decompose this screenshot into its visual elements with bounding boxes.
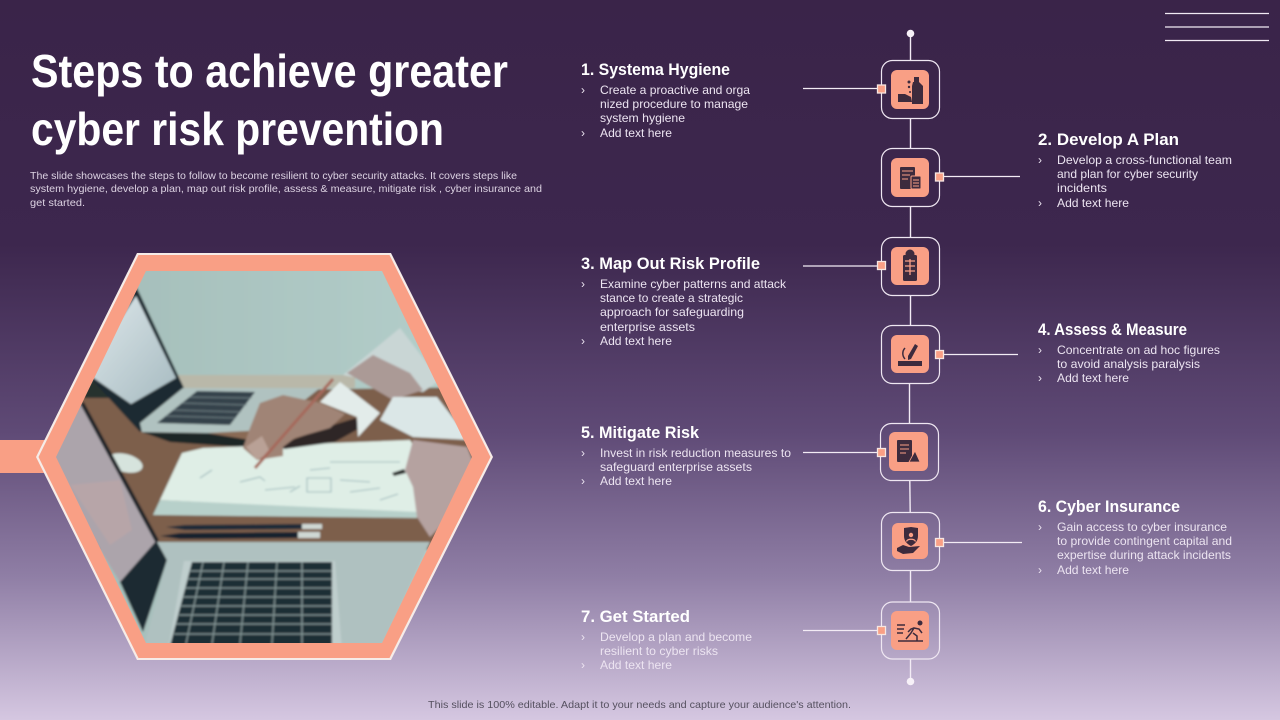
step 7 text: Add text here (600, 658, 672, 672)
step 6 text: Add text here (1057, 563, 1129, 577)
step 3 node (803, 238, 940, 296)
step 6 text (1038, 497, 1232, 577)
timeline start dot (907, 30, 914, 37)
description text: The slide showcases the steps to follow to become resilient to cyber security attacks. It covers steps like (30, 171, 517, 182)
step 5 text (581, 423, 791, 488)
step 3 text: › (581, 334, 585, 348)
step 6 text: › (1038, 520, 1042, 534)
title: cyber risk prevention (31, 103, 444, 155)
step 7 text: Develop a plan and become (600, 630, 752, 644)
step 1 text: › (581, 126, 585, 140)
step 1 text: › (581, 83, 585, 97)
step 3 text: Examine cyber patterns and attack (600, 277, 787, 291)
title: Steps to achieve greater (31, 45, 508, 97)
icon: pencil and ruler (898, 344, 922, 366)
step 7 text: › (581, 630, 585, 644)
step 3 text: stance to create a strategic (600, 291, 743, 305)
timeline spine (910, 33, 911, 681)
description text (30, 171, 542, 209)
step 6 text: 6. Cyber Insurance (1038, 497, 1180, 516)
icon: sanitizer spray and hand (898, 77, 923, 104)
step 6 text: expertise during attack incidents (1057, 548, 1231, 562)
step 4 text: › (1038, 371, 1042, 385)
title (31, 45, 508, 155)
step 6 text: Gain access to cyber insurance (1057, 520, 1227, 534)
step 5 text: safeguard enterprise assets (600, 460, 752, 474)
step 4 text: 4. Assess & Measure (1038, 320, 1187, 339)
step 1 text: Create a proactive and orga (600, 83, 750, 97)
step 5 text: 5. Mitigate Risk (581, 423, 700, 442)
step 5 text: › (581, 474, 585, 488)
step 6 text: to provide contingent capital and (1057, 534, 1232, 548)
description text: get started. (30, 198, 85, 209)
step 4 node (882, 326, 1018, 384)
step 3 text: › (581, 277, 585, 291)
step 5 text: Add text here (600, 474, 672, 488)
step 1 text: nized procedure to manage (600, 97, 748, 111)
step 1 text (581, 60, 750, 140)
decorative menu lines (1165, 14, 1269, 40)
step 3 text: approach for safeguarding (600, 305, 744, 319)
step 7 node (803, 602, 940, 659)
step 3 text: 3. Map Out Risk Profile (581, 254, 760, 273)
icon: running figure (897, 620, 923, 641)
step 2 text: Add text here (1057, 196, 1129, 210)
icon: hand holding shield (897, 527, 920, 554)
timeline end dot (907, 678, 914, 685)
step 5 node (803, 424, 938, 480)
icon: phone with map and gear (903, 250, 917, 281)
step 1 text: 1. Systema Hygiene (581, 60, 730, 79)
hexagon photo frame (36, 253, 493, 660)
accent bar (0, 440, 46, 473)
step 3 text: Add text here (600, 334, 672, 348)
step 2 text (1038, 130, 1232, 210)
step 5 text: › (581, 446, 585, 460)
step 4 text: Add text here (1057, 371, 1129, 385)
step 7 text: 7. Get Started (581, 607, 690, 626)
step 1 node (803, 60, 940, 118)
photo: desk with laptops and hands (40, 265, 480, 650)
step 2 node (882, 148, 1020, 206)
step 1 text: system hygiene (600, 111, 685, 125)
step 3 text (581, 254, 787, 348)
step 7 text (581, 607, 752, 672)
step 4 text: › (1038, 343, 1042, 357)
step 3 text: enterprise assets (600, 320, 695, 334)
step 2 text: › (1038, 153, 1042, 167)
icon: clipboard and warning triangle (897, 440, 920, 462)
description text: system hygiene, develop a plan, map out risk profile, assess & measure, mitigate risk , cyber insurance and (30, 184, 542, 195)
step 1 text: Add text here (600, 126, 672, 140)
step 2 text: 2. Develop A Plan (1038, 130, 1179, 149)
step 7 text: › (581, 658, 585, 672)
icon: plan document and calculator (900, 167, 921, 189)
step 6 node (882, 512, 1022, 570)
step 2 text: Develop a cross-functional team (1057, 153, 1232, 167)
step 4 text: Concentrate on ad hoc figures (1057, 343, 1220, 357)
step 2 text: and plan for cyber security (1057, 167, 1198, 181)
step 2 text: › (1038, 196, 1042, 210)
step 5 text: Invest in risk reduction measures to (600, 446, 791, 460)
step 2 text: incidents (1057, 181, 1107, 195)
footer note: This slide is 100% editable. Adapt it to your needs and capture your audience's attention. (428, 700, 851, 711)
step 6 text: › (1038, 563, 1042, 577)
step 7 text: resilient to cyber risks (600, 644, 718, 658)
step 4 text: to avoid analysis paralysis (1057, 357, 1200, 371)
step 4 text (1038, 320, 1220, 385)
